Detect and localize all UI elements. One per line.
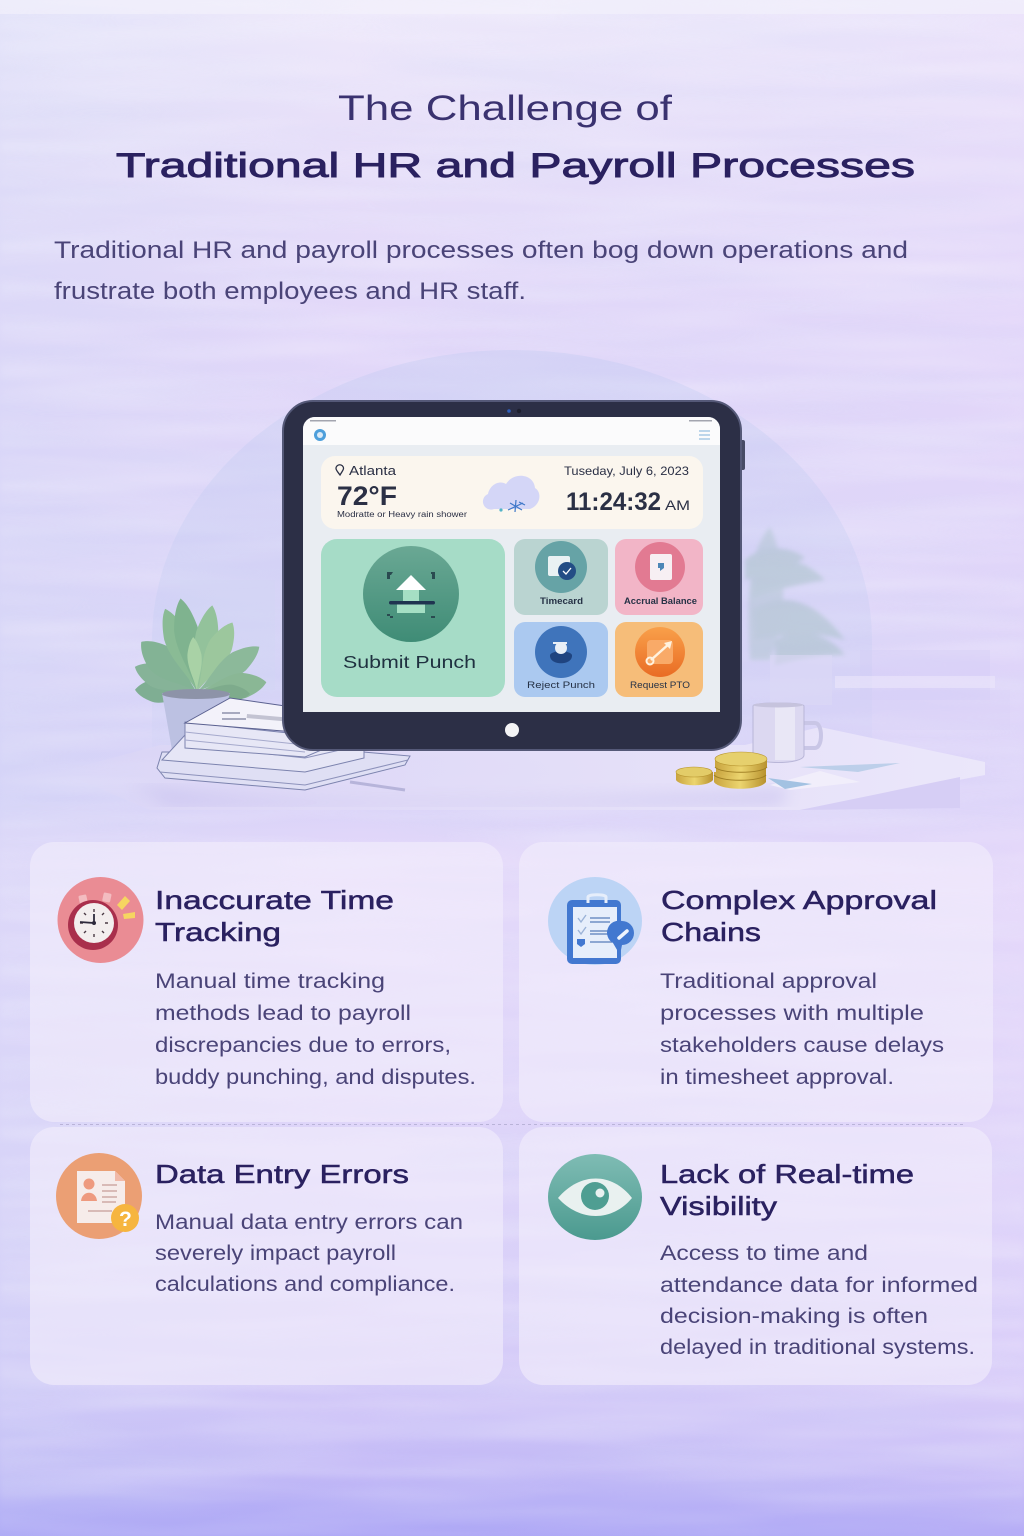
panel: inaccurate time tracking bbox=[30, 842, 503, 1122]
weather card: Atlanta bbox=[349, 463, 397, 478]
card heading bbox=[155, 885, 394, 947]
weather card: AM bbox=[665, 497, 690, 513]
card body: calculations and compliance. bbox=[155, 1273, 455, 1296]
weather card bbox=[321, 456, 703, 529]
request pto button: Request PTO bbox=[630, 680, 690, 690]
card heading: Chains bbox=[661, 917, 761, 947]
icon: eye bbox=[548, 1154, 642, 1240]
request pto button bbox=[615, 622, 703, 697]
reject punch button: Reject Punch bbox=[527, 680, 595, 690]
card heading: Visibility bbox=[660, 1191, 777, 1221]
icon: clipboard bbox=[548, 877, 642, 965]
icon: potted plant bbox=[130, 596, 268, 751]
title: Traditional HR and Payroll Processes bbox=[116, 147, 915, 185]
weather card: 72°F bbox=[337, 481, 397, 511]
intro text: Traditional HR and payroll processes often bog down operations and bbox=[54, 237, 908, 264]
intro text: frustrate both employees and HR staff. bbox=[54, 278, 526, 305]
card body: Access to time and bbox=[660, 1242, 868, 1265]
card body: methods lead to payroll bbox=[155, 1002, 411, 1025]
card body: Manual time tracking bbox=[155, 970, 385, 993]
card body: Traditional approval bbox=[660, 970, 877, 993]
icon: paper stack bbox=[157, 698, 410, 790]
card heading: Complex Approval bbox=[661, 885, 937, 915]
faint background plant bbox=[745, 527, 845, 665]
title: The Challenge of bbox=[338, 89, 672, 128]
background office scene bbox=[152, 350, 1010, 800]
title bbox=[116, 89, 915, 185]
tablet bbox=[283, 401, 745, 750]
icon: coins and notes bbox=[676, 752, 900, 790]
timecard button bbox=[514, 539, 608, 615]
card heading bbox=[660, 1159, 914, 1221]
accrual balance button: Accrual Balance bbox=[624, 596, 697, 606]
submit punch button: Submit Punch bbox=[343, 652, 476, 672]
panel: data entry errors bbox=[30, 1127, 503, 1385]
panel: lack of real-time visibility bbox=[519, 1127, 992, 1385]
timecard button: Timecard bbox=[540, 596, 583, 606]
icon: coffee mug bbox=[753, 702, 821, 762]
card body: buddy punching, and disputes. bbox=[155, 1066, 476, 1089]
card heading: Inaccurate Time bbox=[155, 885, 394, 915]
desk bbox=[60, 727, 985, 810]
weather card: Tuseday, July 6, 2023 bbox=[564, 464, 689, 478]
panel: complex approval chains bbox=[519, 842, 993, 1122]
icon: document with question mark bbox=[56, 1153, 142, 1239]
card body: discrepancies due to errors, bbox=[155, 1034, 451, 1057]
icon: document with question mark: ? bbox=[119, 1208, 132, 1231]
accrual balance button bbox=[615, 539, 703, 615]
card heading: Lack of Real-time bbox=[660, 1159, 914, 1189]
reject punch button bbox=[514, 622, 608, 697]
submit punch button bbox=[321, 539, 505, 697]
card body: decision-making is often bbox=[660, 1305, 928, 1328]
card body: attendance data for informed bbox=[660, 1274, 978, 1297]
card heading: Tracking bbox=[155, 917, 281, 947]
card body bbox=[660, 1242, 978, 1359]
card body: severely impact payroll bbox=[155, 1242, 396, 1265]
weather card: 11:24:32 bbox=[566, 488, 661, 516]
weather card: Modratte or Heavy rain shower bbox=[337, 510, 467, 519]
card body: in timesheet approval. bbox=[660, 1066, 894, 1089]
card body bbox=[155, 1211, 463, 1296]
card body: Manual data entry errors can bbox=[155, 1211, 463, 1234]
tablet screen bbox=[303, 417, 720, 712]
icon: rain cloud bbox=[483, 476, 539, 512]
icon: alarm clock bbox=[58, 877, 144, 963]
card body: stakeholders cause delays bbox=[660, 1034, 944, 1057]
intro text bbox=[54, 237, 908, 305]
card heading bbox=[661, 885, 937, 947]
card body bbox=[660, 970, 944, 1089]
card body bbox=[155, 970, 476, 1089]
card body: delayed in traditional systems. bbox=[660, 1336, 975, 1359]
card body: processes with multiple bbox=[660, 1002, 924, 1025]
card heading: Data Entry Errors bbox=[155, 1159, 409, 1189]
